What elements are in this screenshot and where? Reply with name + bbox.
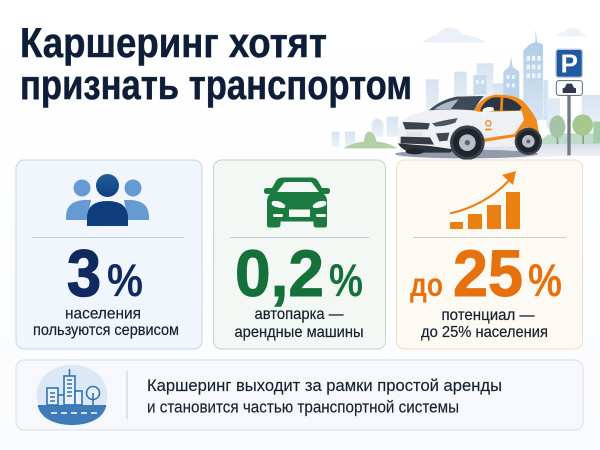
stat: up to 25%: %: [528, 254, 562, 306]
caption: potential: [421, 307, 548, 341]
stat: 0,2%: %: [329, 254, 363, 306]
stat: up to 25%: 25: [453, 236, 523, 310]
caption: population: пользуются сервисом: [33, 322, 179, 339]
conclusion text: Каршеринг выходит за рамки простой аренды: [147, 376, 502, 395]
panel: conclusion: [16, 360, 583, 430]
stat: 3%: 3: [67, 236, 101, 310]
city skyline: [332, 27, 600, 147]
stat: 3%: [67, 236, 143, 310]
panel: population: [16, 160, 202, 349]
title: [20, 19, 412, 108]
caption: potential: потенциал —: [442, 307, 534, 324]
stat: 3%: %: [107, 254, 143, 306]
conclusion text: [147, 376, 502, 416]
caption: population: [33, 306, 179, 339]
icon: people: [66, 174, 149, 226]
icon: car front: [264, 178, 330, 228]
caption: fleet: [234, 306, 364, 341]
title: Каршеринг хотят: [20, 19, 327, 66]
panel: fleet: [214, 160, 386, 349]
icon: growth chart: [450, 171, 520, 229]
stat: up to 25%: [410, 236, 562, 310]
car: [397, 94, 542, 160]
panel: potential: [396, 160, 582, 349]
illustration: city, car and parking sign: [332, 27, 600, 160]
road and ground shadow: [393, 144, 600, 159]
conclusion text: и становится частью транспортной системы: [147, 398, 459, 416]
icon: city and road: [36, 364, 108, 426]
stat: up to 25%: до: [410, 266, 443, 303]
title: признать транспортом: [20, 61, 412, 108]
caption: potential: до 25% населения: [421, 324, 548, 341]
caption: fleet: автопарка —: [254, 306, 344, 323]
stat: 0,2%: 0,2: [235, 236, 324, 310]
caption: population: населения: [65, 306, 141, 322]
parking sign: [556, 48, 582, 155]
trees: [343, 114, 600, 148]
parking sign: P: [561, 48, 578, 78]
caption: fleet: арендные машины: [234, 324, 364, 341]
